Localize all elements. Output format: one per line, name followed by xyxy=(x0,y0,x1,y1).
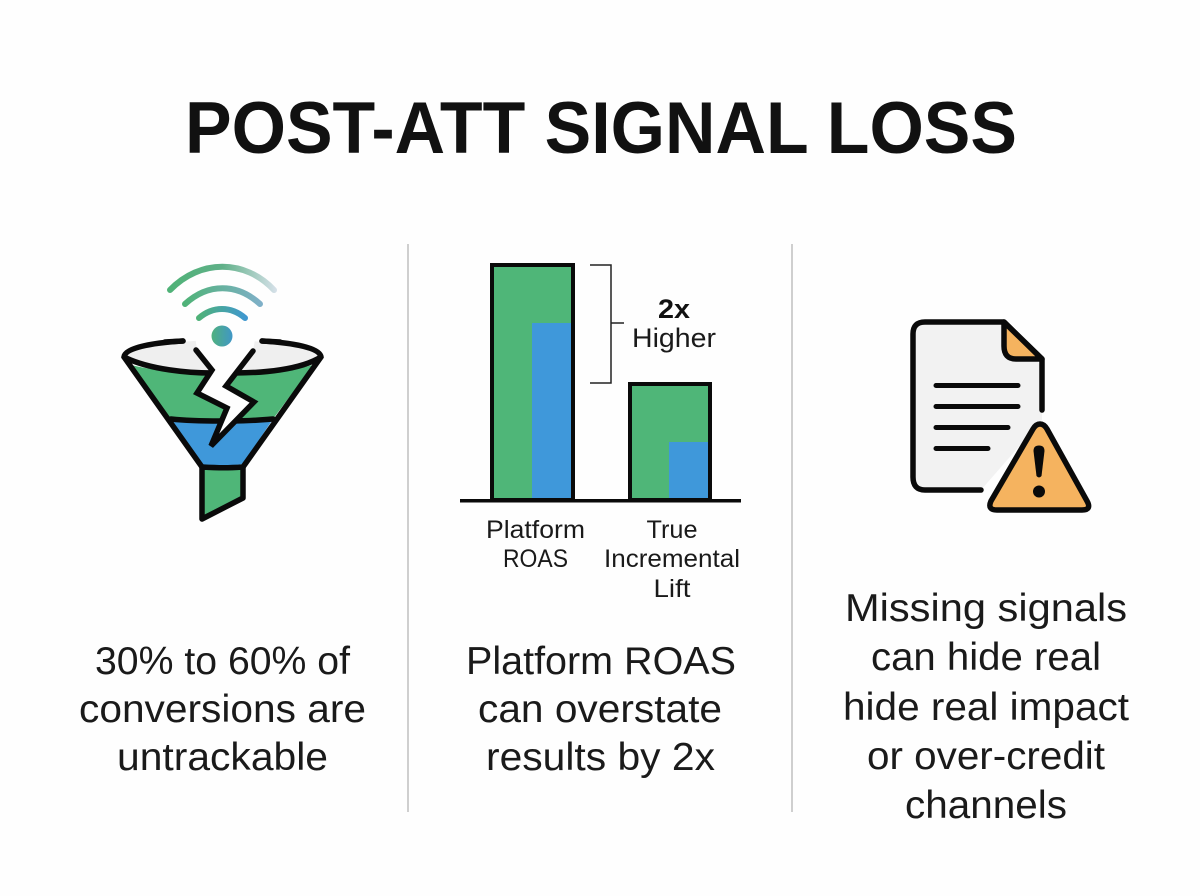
funnel outline xyxy=(124,341,321,467)
funnel spout xyxy=(202,467,243,519)
document fold xyxy=(1004,322,1042,359)
text: ROAS overstatement: can overstate xyxy=(478,688,722,731)
text: ROAS overstatement: Platform ROAS xyxy=(466,640,736,683)
text: missing signals: or over-credit xyxy=(867,735,1105,778)
label: True Incremental Lift: True xyxy=(646,516,698,544)
bracket xyxy=(590,265,624,383)
warning triangle xyxy=(990,424,1089,510)
callout: 2x higher: 2x xyxy=(658,294,690,324)
rim ends redraw xyxy=(165,341,280,342)
label: True Incremental Lift xyxy=(604,516,740,603)
axis xyxy=(460,499,741,502)
document text lines xyxy=(936,386,1018,448)
label: True Incremental Lift: Incremental xyxy=(604,545,740,573)
text: ROAS overstatement xyxy=(466,640,736,779)
label: True Incremental Lift: Lift xyxy=(654,575,691,603)
text: ROAS overstatement: results by 2x xyxy=(486,736,716,779)
funnel glass xyxy=(125,340,320,372)
icon: document with warning xyxy=(913,322,1089,510)
text: missing signals: Missing signals xyxy=(845,587,1127,630)
divider right xyxy=(791,244,793,812)
panel: missing signals xyxy=(843,322,1129,827)
document xyxy=(913,322,1042,490)
text: untrackable conversions: conversions are xyxy=(79,688,366,731)
callout: 2x higher: Higher xyxy=(632,323,716,353)
text: missing signals: channels xyxy=(905,784,1067,827)
title: POST-ATT SIGNAL LOSS xyxy=(185,88,1017,169)
lightning crack xyxy=(190,300,262,446)
bar chart xyxy=(460,265,741,603)
document outline xyxy=(913,322,1042,490)
text: untrackable conversions: untrackable xyxy=(117,736,328,779)
text: missing signals: can hide real xyxy=(871,636,1101,679)
label: Platform ROAS xyxy=(486,516,585,573)
label: Platform ROAS: Platform xyxy=(486,516,585,544)
wifi arcs xyxy=(170,267,274,290)
icon: broken funnel with wifi signal xyxy=(124,267,321,519)
panel: platform ROAS comparison xyxy=(460,265,741,779)
text: missing signals xyxy=(843,587,1129,827)
warning exclamation xyxy=(1034,446,1044,478)
text: missing signals: hide real impact xyxy=(843,686,1129,729)
label: Platform ROAS: ROAS xyxy=(503,545,568,573)
funnel green band xyxy=(131,365,313,420)
divider left xyxy=(407,244,409,812)
bar: True Incremental Lift xyxy=(630,384,710,500)
funnel blue band xyxy=(171,419,273,466)
text: untrackable conversions: 30% to 60% of xyxy=(95,640,350,683)
wifi dot xyxy=(212,326,232,346)
panel: untrackable conversions xyxy=(79,267,366,779)
bar: Platform ROAS xyxy=(492,265,573,500)
callout: 2x higher xyxy=(632,294,716,353)
text: untrackable conversions xyxy=(79,640,366,779)
